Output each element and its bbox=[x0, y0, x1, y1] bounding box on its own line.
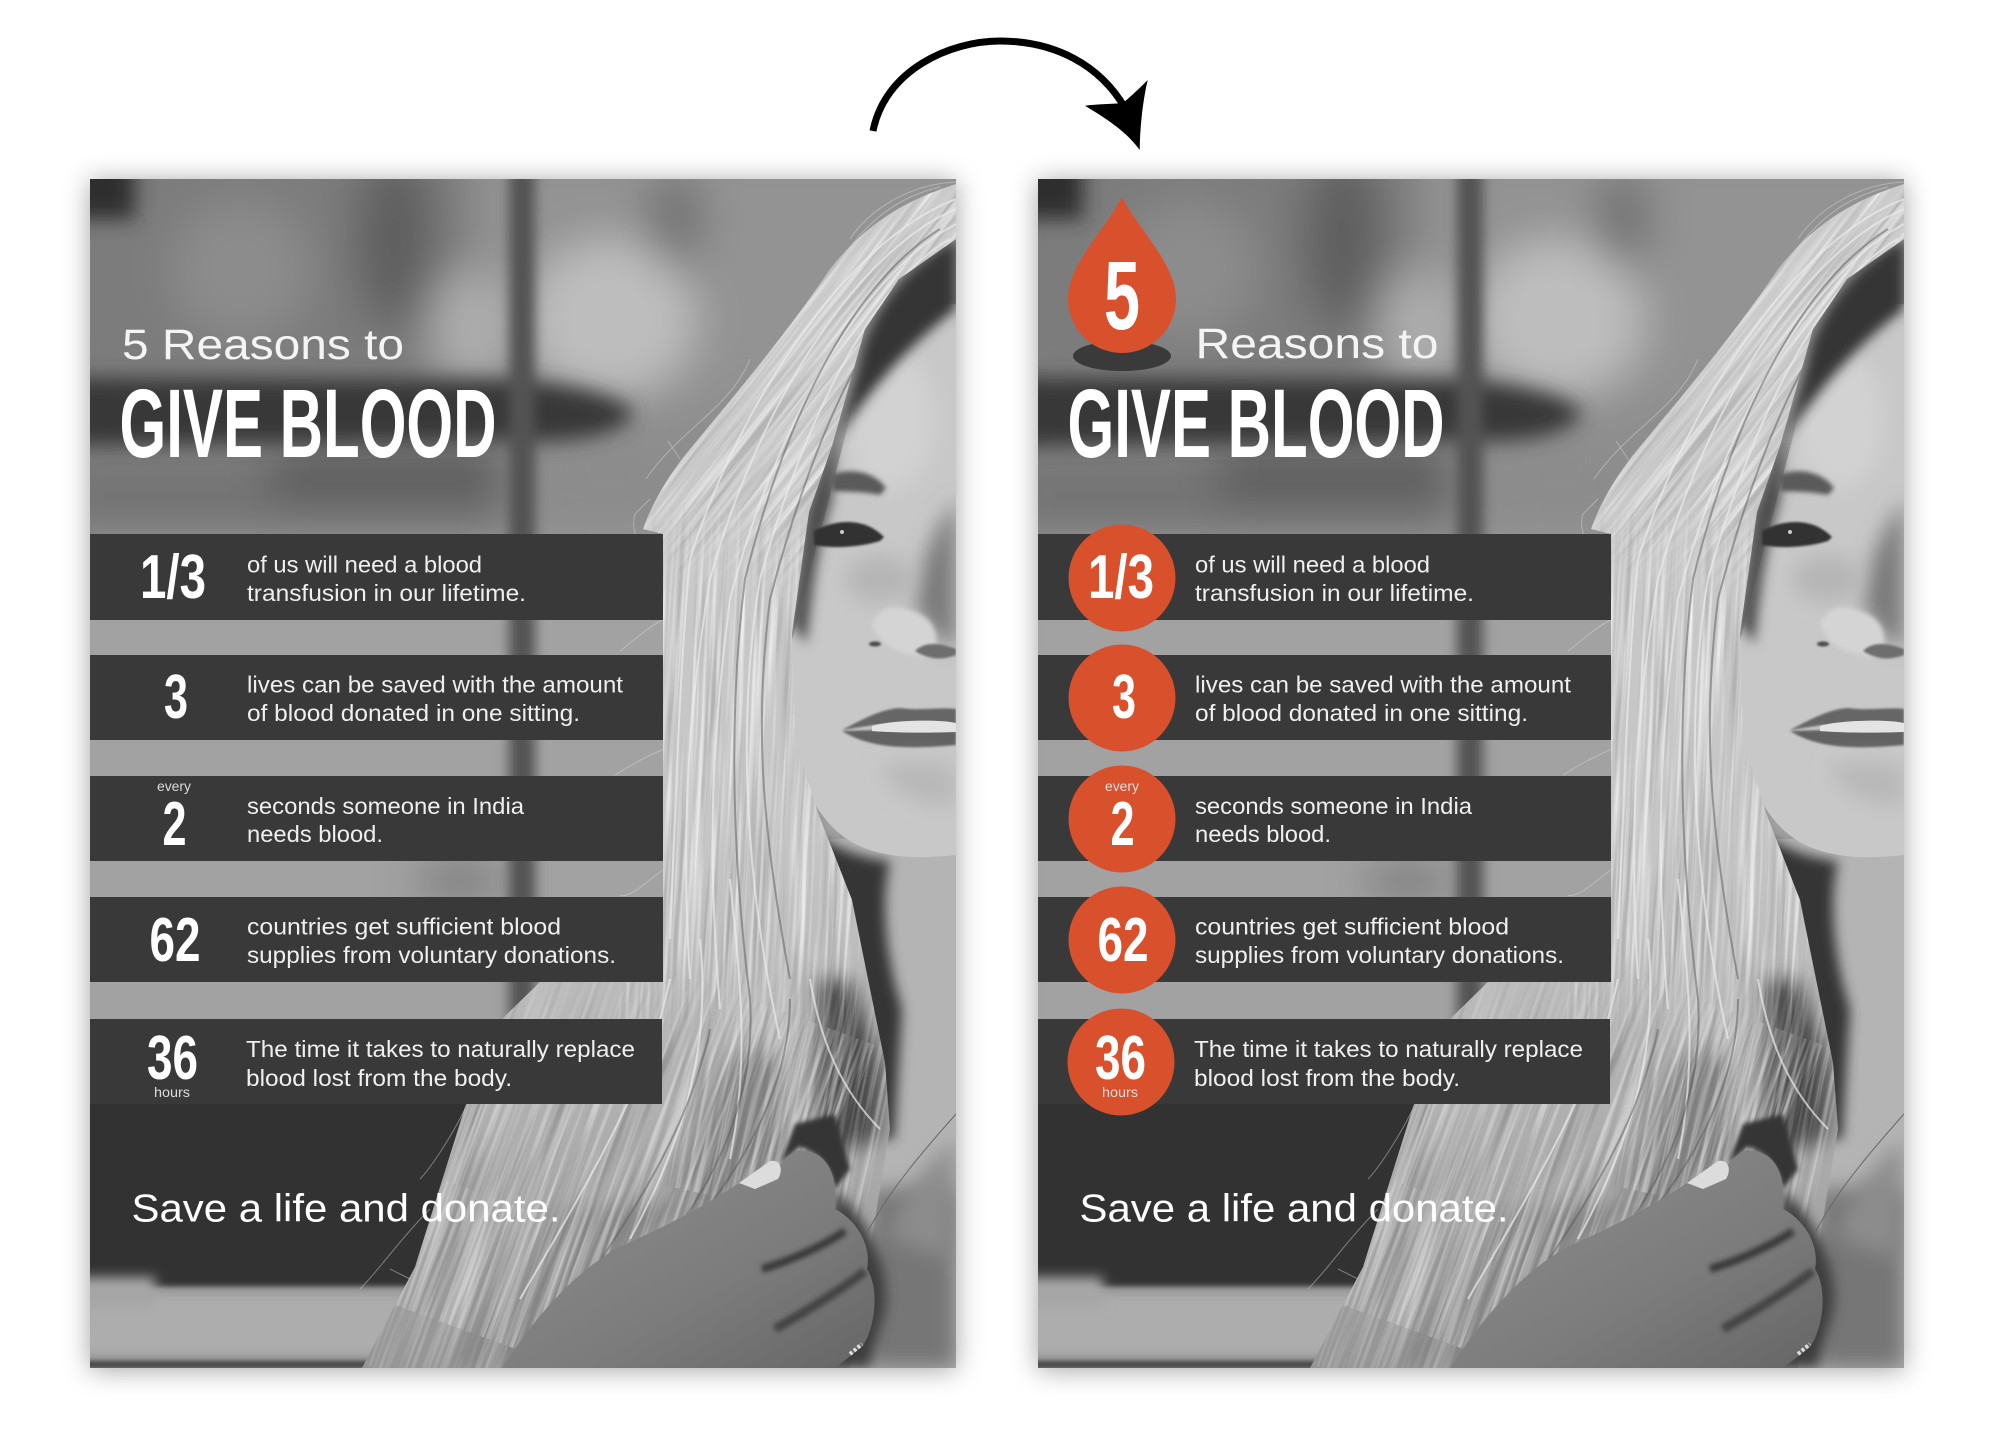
stat row: 36 hours: hours bbox=[154, 1084, 190, 1100]
panel: poster with orange accents (right) bbox=[1022, 164, 1920, 1386]
heading: Reasons to: Reasons to bbox=[1196, 320, 1438, 368]
icon: blood drop with 5 bbox=[1068, 197, 1176, 371]
stat row: 36 hours bbox=[1038, 1008, 1610, 1116]
photo background bbox=[90, 179, 956, 1368]
stat row: 36 hours: blood lost from the body. bbox=[246, 1065, 512, 1091]
stat row: 3: lives can be saved with the amount bbox=[247, 672, 624, 698]
stat row: 3: of blood donated in one sitting. bbox=[247, 700, 580, 726]
stat row: 3: 3 bbox=[164, 663, 188, 732]
stat row: 1/3 bbox=[90, 534, 663, 620]
stat row: every 2 bbox=[1038, 766, 1611, 872]
stat row: 62: countries get sufficient blood bbox=[1195, 914, 1509, 940]
stat row: 1/3 bbox=[1038, 524, 1611, 632]
arrow from left panel to right panel bbox=[873, 41, 1148, 150]
stat row: 1/3: transfusion in our lifetime. bbox=[247, 580, 526, 606]
stat row: every 2: seconds someone in India bbox=[247, 793, 524, 819]
stat row: 36 hours: 36 bbox=[147, 1024, 198, 1093]
stat row: 62: 62 bbox=[1098, 906, 1148, 975]
stat row: 1/3: 1/3 bbox=[140, 543, 206, 612]
stat row: 1/3: transfusion in our lifetime. bbox=[1195, 580, 1474, 606]
stat row: 36 hours: The time it takes to naturally replace bbox=[246, 1036, 635, 1062]
stat row: 3: of blood donated in one sitting. bbox=[1195, 700, 1528, 726]
stat row: 62: supplies from voluntary donations. bbox=[1195, 942, 1564, 968]
closing line: Save a life and donate. bbox=[132, 1188, 561, 1231]
stat row: 62: 62 bbox=[150, 906, 200, 975]
stat row: every 2: every bbox=[1105, 778, 1139, 794]
icon: blood drop with 5: 5 bbox=[1104, 241, 1140, 350]
stat row: 36 hours: hours bbox=[1102, 1084, 1138, 1100]
stat row: 3: lives can be saved with the amount bbox=[1195, 672, 1572, 698]
stat row: every 2: every bbox=[157, 778, 191, 794]
stat row: 62 bbox=[1038, 886, 1611, 994]
stat row: every 2: 2 bbox=[162, 790, 186, 859]
closing line: Save a life and donate. bbox=[1080, 1188, 1509, 1231]
stat row: every 2: needs blood. bbox=[1195, 821, 1331, 847]
stat row: 3 bbox=[1038, 644, 1611, 752]
heading: GIVE BLOOD: GIVE BLOOD bbox=[1068, 369, 1444, 478]
stat row: 62: countries get sufficient blood bbox=[247, 914, 561, 940]
stat row: 36 hours: 36 bbox=[1095, 1024, 1146, 1093]
stat row: 1/3: 1/3 bbox=[1088, 543, 1154, 612]
stat row: every 2: 2 bbox=[1110, 790, 1134, 859]
heading: 5 Reasons to: 5 Reasons to bbox=[122, 321, 404, 369]
stat row: 1/3: of us will need a blood bbox=[1195, 552, 1430, 578]
stat row: 62 bbox=[90, 897, 663, 982]
stat row: every 2: needs blood. bbox=[247, 821, 383, 847]
stat row: 3: 3 bbox=[1112, 663, 1136, 732]
stat row: 3 bbox=[90, 655, 663, 740]
stat row: 1/3: of us will need a blood bbox=[247, 552, 482, 578]
stat row: 62: supplies from voluntary donations. bbox=[247, 942, 616, 968]
heading: GIVE BLOOD: GIVE BLOOD bbox=[120, 369, 496, 478]
stat row: 36 hours: blood lost from the body. bbox=[1194, 1065, 1460, 1091]
panel: plain poster (left) bbox=[74, 164, 972, 1386]
stat row: every 2: seconds someone in India bbox=[1195, 793, 1472, 819]
stat row: 36 hours: The time it takes to naturally replace bbox=[1194, 1036, 1583, 1062]
stat row: every 2 bbox=[90, 776, 663, 861]
photo background bbox=[1038, 179, 1904, 1368]
stat row: 36 hours bbox=[90, 1019, 662, 1104]
